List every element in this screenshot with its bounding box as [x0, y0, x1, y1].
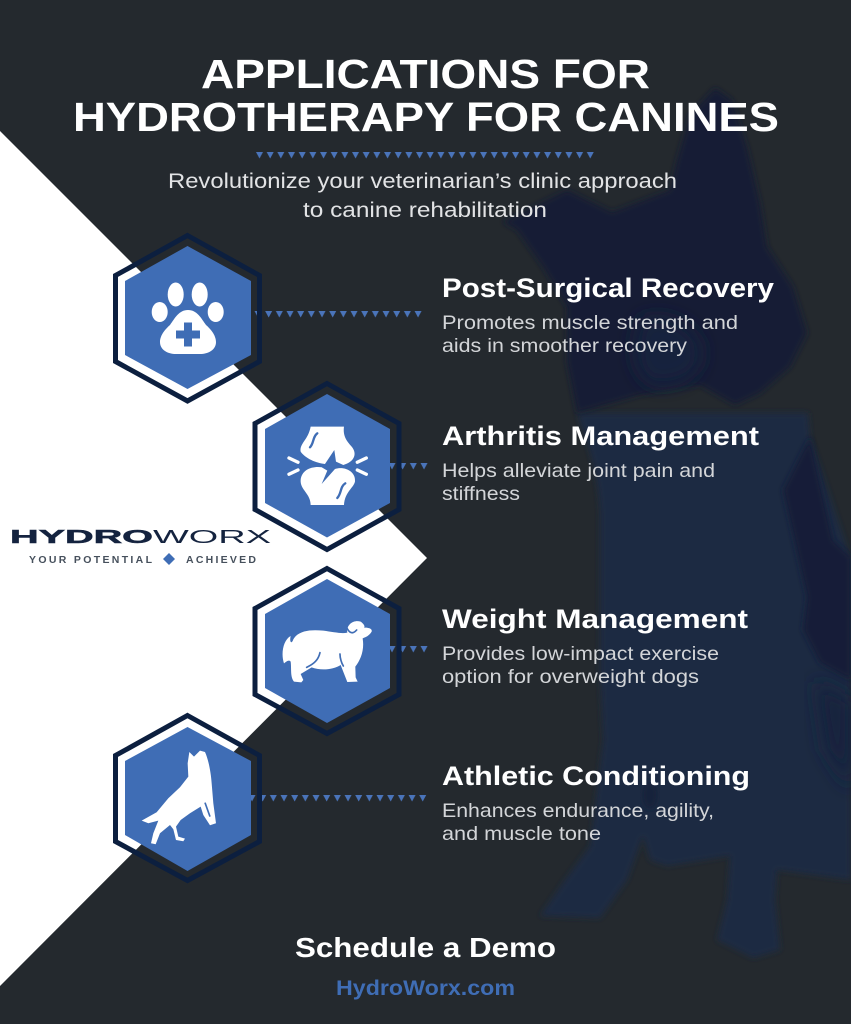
subtitle — [168, 170, 677, 222]
item: arthritis management — [442, 421, 759, 505]
item: arthritis management: Arthritis Management — [442, 421, 759, 451]
hexagon: arthritis management — [255, 384, 399, 550]
hexagon: post-surgical recovery — [116, 236, 260, 401]
call to action: Schedule a Demo — [295, 932, 556, 963]
item: weight management — [442, 604, 748, 688]
hexagon: athletic conditioning — [116, 716, 260, 880]
connector: post-surgical — [253, 311, 424, 318]
item: post-surgical recovery: Promotes muscle strength and — [442, 312, 738, 334]
connector: athletic — [247, 795, 429, 802]
item: post-surgical recovery — [442, 273, 774, 357]
item: athletic conditioning: Athletic Conditioning — [442, 761, 750, 791]
subtitle: Revolutionize your veterinarian’s clinic approach — [168, 170, 677, 193]
item: arthritis management: stiffness — [442, 483, 520, 505]
item: post-surgical recovery: aids in smoother recovery — [442, 335, 687, 357]
title divider: triangles — [254, 152, 596, 159]
title — [73, 51, 779, 140]
item: post-surgical recovery: Post-Surgical Recovery — [442, 273, 774, 303]
icon: knee joint — [289, 427, 366, 505]
connector: arthritis — [387, 463, 429, 470]
item: weight management: Provides low-impact exercise — [442, 643, 719, 665]
logo: HydroWorx: YOUR POTENTIAL — [29, 554, 153, 566]
logo: HydroWorx: WORX — [153, 527, 271, 547]
item: arthritis management: Helps alleviate joint pain and — [442, 460, 715, 482]
subtitle: to canine rehabilitation — [303, 199, 547, 222]
website link: HydroWorx.com — [336, 977, 515, 1000]
hexagon: weight management — [255, 568, 399, 734]
logo: HydroWorx — [10, 527, 271, 566]
item: athletic conditioning: and muscle tone — [442, 823, 601, 845]
item: athletic conditioning — [442, 761, 750, 845]
icon: howling wolf — [142, 751, 216, 844]
dog photo silhouette — [503, 88, 851, 958]
item: weight management: Weight Management — [442, 604, 748, 634]
icon: paw with cross — [152, 282, 224, 354]
title: APPLICATIONS FOR — [201, 51, 650, 97]
white diagonal panel — [0, 131, 427, 986]
connector: weight — [387, 646, 429, 653]
item: athletic conditioning: Enhances endurance, agility, — [442, 800, 714, 822]
icon: overweight dog — [283, 621, 372, 682]
logo: HydroWorx: HYDRO — [10, 527, 153, 547]
title: HYDROTHERAPY FOR CANINES — [73, 94, 779, 140]
item: weight management: option for overweight dogs — [442, 666, 699, 688]
logo: HydroWorx: ACHIEVED — [186, 554, 256, 566]
